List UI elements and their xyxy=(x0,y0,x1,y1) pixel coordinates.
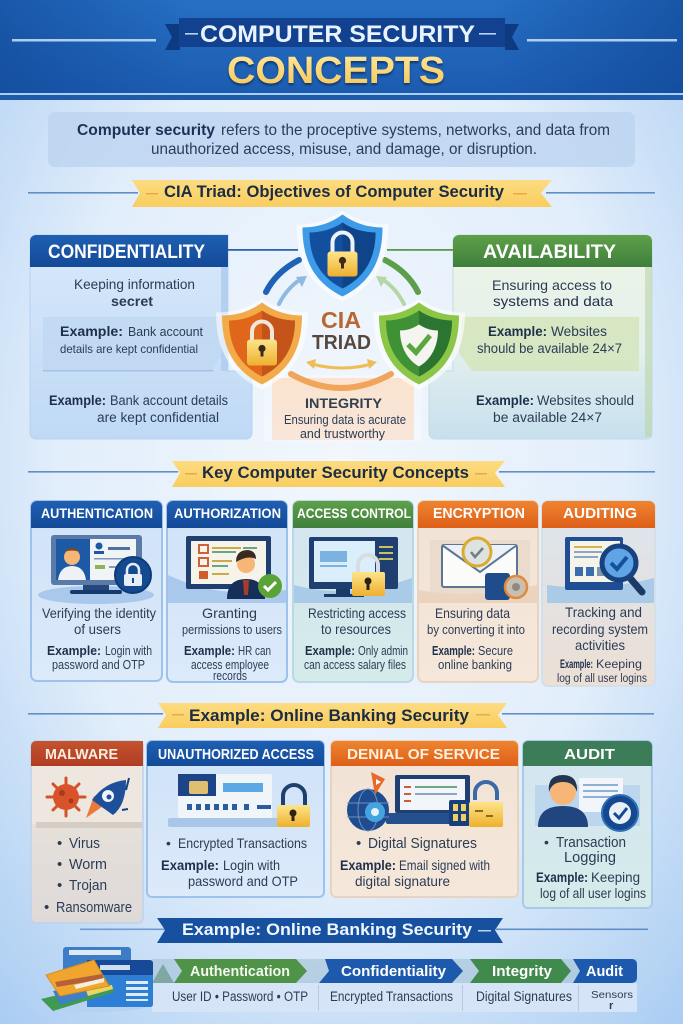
card text: permissions to users xyxy=(182,623,282,637)
bullet list: Worm xyxy=(69,856,107,873)
header: CONFIDENTIALITY xyxy=(48,242,205,263)
description xyxy=(492,277,613,309)
card text: Login with xyxy=(223,857,280,873)
card: authentication: AUTHENTICATION xyxy=(41,505,153,521)
example text: are kept confidential xyxy=(97,410,219,425)
example band: Example: xyxy=(488,323,547,339)
panel: integrity: and trustworthy xyxy=(300,427,386,441)
step: audit: Audit xyxy=(586,963,623,980)
process flow xyxy=(152,959,637,1012)
card: malware xyxy=(31,741,143,923)
bullet list: • xyxy=(57,856,62,873)
card text: Encrypted Transactions xyxy=(178,835,307,851)
card text: can access salary files xyxy=(304,658,406,672)
card: malware: MALWARE xyxy=(45,746,118,763)
section banner: online banking (blue): Example: Online Banking Security xyxy=(182,920,473,939)
card: auditing: AUDITING xyxy=(563,505,637,522)
header xyxy=(453,235,652,267)
card text: Example: xyxy=(305,644,355,658)
CIA triad label: TRIAD xyxy=(312,332,371,354)
title line 1: COMPUTER SECURITY xyxy=(200,21,475,48)
card: denial of service: DENIAL OF SERVICE xyxy=(347,746,500,763)
example text xyxy=(476,393,634,425)
card text xyxy=(182,605,282,683)
card text xyxy=(427,605,525,672)
card: denial of service xyxy=(331,741,518,897)
card text: Keeping xyxy=(596,659,642,671)
card text: recording system xyxy=(552,621,648,637)
step: confidentiality xyxy=(319,959,463,983)
card: access control xyxy=(293,501,413,682)
section banner: CIA triad: CIA Triad: Objectives of Computer Security xyxy=(164,183,505,201)
card text: Granting xyxy=(202,605,257,621)
flow details: Digital Signatures xyxy=(476,989,572,1004)
panel: availability xyxy=(429,235,652,439)
card: authentication xyxy=(31,501,162,681)
card text xyxy=(340,835,490,889)
bullet list: • xyxy=(44,899,49,916)
icon: permissions screen xyxy=(168,536,286,603)
card text xyxy=(42,605,156,672)
card: auditing xyxy=(542,501,655,686)
example band: Websites xyxy=(551,323,607,339)
card text: Email signed with xyxy=(399,857,490,873)
step: authentication xyxy=(174,959,307,983)
card text: • xyxy=(166,835,171,851)
section banner: key concepts xyxy=(28,461,655,487)
intro box xyxy=(48,112,635,167)
card text: digital signature xyxy=(355,873,450,889)
bullet list: Virus xyxy=(69,835,100,852)
icon: blue shield xyxy=(296,210,388,302)
card: unauthorized access: UNAUTHORIZED ACCESS xyxy=(158,746,314,763)
icon: green shield xyxy=(373,298,465,390)
example text xyxy=(49,393,228,425)
card text: password and OTP xyxy=(188,873,298,889)
card text: to resources xyxy=(321,621,391,637)
panel: integrity: Ensuring data is acurate xyxy=(284,413,406,427)
icon: orange shield xyxy=(216,298,308,390)
intro box: Computer security xyxy=(77,122,215,139)
card text: Tracking and xyxy=(565,604,642,620)
example text: Example: xyxy=(49,393,106,408)
card text: records xyxy=(213,669,247,683)
description: Ensuring access to xyxy=(492,277,612,293)
card: audit xyxy=(523,741,652,908)
intro box: refers to the proceptive systems, networks, and data from xyxy=(221,122,610,139)
panel: integrity: INTEGRITY xyxy=(305,395,383,411)
flow details: Encrypted Transactions xyxy=(330,989,453,1004)
icon: auditor and document xyxy=(535,775,640,831)
card text: Transaction xyxy=(556,835,626,851)
intro box: unauthorized access, misuse, and damage, or disruption. xyxy=(151,141,537,158)
card text: of users xyxy=(74,621,121,637)
bullet list xyxy=(44,835,132,916)
icon: bank cards and folder xyxy=(32,947,153,1012)
card text: Secure xyxy=(478,644,513,658)
connector lines xyxy=(228,249,453,251)
section banner: key concepts: Key Computer Security Concepts xyxy=(202,463,469,482)
icon: envelope and key xyxy=(419,538,537,603)
icon: virus and rocket xyxy=(32,766,142,828)
card text: • xyxy=(356,835,361,852)
header band xyxy=(0,0,683,100)
icon: globe, monitor and lock xyxy=(347,772,503,831)
example band xyxy=(459,317,639,371)
card text: online banking xyxy=(438,658,512,672)
flow details xyxy=(172,989,633,1012)
card text xyxy=(304,605,408,672)
card text: Only admin xyxy=(358,644,408,658)
example band: Example: xyxy=(60,323,123,339)
example text: be available 24×7 xyxy=(493,410,602,425)
card text xyxy=(161,835,307,889)
card text: HR can xyxy=(238,644,271,658)
card text: activities xyxy=(575,637,625,653)
icon: monitor with magnifier xyxy=(547,537,654,603)
section banner: online banking (blue) xyxy=(80,918,648,943)
example text: Bank account details xyxy=(110,393,228,408)
card text: Login with xyxy=(105,644,152,658)
example text: Websites should xyxy=(537,393,634,408)
card: access control: ACCESS CONTROL xyxy=(297,505,411,521)
icon: monitor with padlock xyxy=(294,537,412,603)
card: authorization xyxy=(167,501,287,683)
card: audit: AUDIT xyxy=(564,746,615,763)
section banner: online banking (yellow): Example: Online Banking Security xyxy=(189,706,470,725)
step: integrity xyxy=(470,959,571,983)
example band: details are kept confidential xyxy=(60,342,198,356)
bullet list: • xyxy=(57,835,62,852)
description: secret xyxy=(111,293,153,309)
card text: log of all user logins xyxy=(540,885,646,901)
card text: Example: xyxy=(432,644,475,658)
card text: • xyxy=(544,834,549,850)
step: integrity: Integrity xyxy=(492,963,553,980)
CIA triad label: CIA xyxy=(321,307,361,333)
double arrow xyxy=(306,359,377,369)
card: authorization: AUTHORIZATION xyxy=(174,505,281,521)
icon: bank card and lock xyxy=(168,774,310,827)
step: confidentiality: Confidentiality xyxy=(341,963,447,980)
card text xyxy=(536,834,646,901)
card text: Example: xyxy=(161,857,219,873)
description: Keeping information xyxy=(74,276,195,292)
card text: Logging xyxy=(564,850,616,866)
example band: Bank account xyxy=(128,324,203,339)
card text: Example: xyxy=(560,659,593,671)
flow details: r xyxy=(609,1000,614,1012)
header: AVAILABILITY xyxy=(483,242,616,263)
description xyxy=(74,276,195,309)
card text: access employee xyxy=(191,658,269,672)
card text xyxy=(552,604,648,685)
description: systems and data xyxy=(493,293,613,309)
card text: Verifying the identity xyxy=(42,605,156,621)
card text: Example: xyxy=(340,857,396,873)
CIA triad label xyxy=(306,307,377,369)
card text: Example: xyxy=(47,644,101,658)
header xyxy=(30,235,228,267)
example band: should be available 24×7 xyxy=(477,341,622,356)
side lines xyxy=(12,39,677,42)
card text: log of all user logins xyxy=(557,673,647,685)
panel: integrity xyxy=(264,375,422,441)
card text: Keeping xyxy=(591,869,640,885)
arcs and arrows around the triad xyxy=(266,260,418,388)
card text: by converting it into xyxy=(427,622,525,637)
example band xyxy=(43,317,222,372)
title line 2: CONCEPTS xyxy=(227,50,445,92)
title ribbon xyxy=(165,18,519,50)
section banner: online banking (yellow) xyxy=(28,703,654,728)
icon: user monitor with lock xyxy=(38,535,154,604)
card text: password and OTP xyxy=(52,658,145,672)
step: audit xyxy=(573,959,637,983)
card text: Restricting access xyxy=(308,605,406,621)
bullet list: Ransomware xyxy=(56,899,132,916)
bullet list: • xyxy=(57,877,62,894)
card text: Example: xyxy=(536,869,588,885)
card text: Example: xyxy=(184,644,235,658)
flow details: Sensors xyxy=(591,989,633,1001)
step: authentication: Authentication xyxy=(190,963,290,980)
example text: Example: xyxy=(476,393,534,408)
card: unauthorized access xyxy=(147,741,324,897)
bullet list: Trojan xyxy=(69,877,107,894)
panel: confidentiality xyxy=(30,235,252,439)
flow details: User ID • Password • OTP xyxy=(172,989,308,1004)
card: encryption xyxy=(418,501,538,682)
section banner: CIA triad xyxy=(28,180,655,207)
card: encryption: ENCRYPTION xyxy=(433,505,525,522)
card text: Digital Signatures xyxy=(368,835,477,852)
card text: Ensuring data xyxy=(435,605,510,621)
